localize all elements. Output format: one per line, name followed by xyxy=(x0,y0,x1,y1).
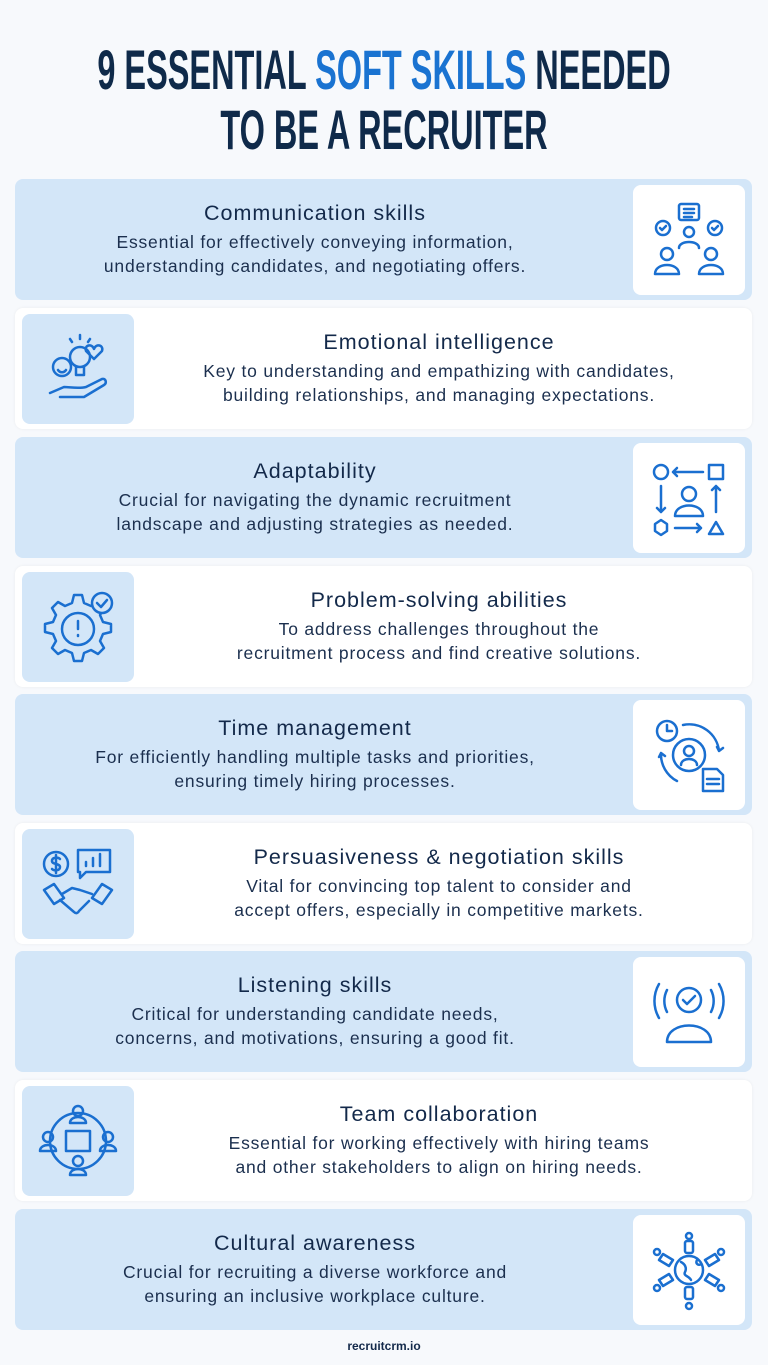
text: emotional: Key to understanding and empathizing with candidates, xyxy=(203,361,675,381)
text: communication: understanding candidates, and negotiating offers. xyxy=(104,256,526,276)
panel: cultural awareness xyxy=(15,1209,752,1330)
panel: team collaboration xyxy=(15,1080,752,1201)
panel: persuasiveness xyxy=(15,823,752,944)
text: team: Team collaboration xyxy=(340,1102,538,1126)
text: time: For efficiently handling multiple tasks and priorities, xyxy=(95,747,535,767)
text: communication: Communication skills xyxy=(204,201,426,225)
icon: negotiation xyxy=(22,829,134,939)
icon: communication xyxy=(633,185,745,295)
icon: team xyxy=(22,1086,134,1196)
text: team: Essential for working effectively with hiring teams xyxy=(229,1133,649,1153)
text: persuasiveness: Persuasiveness & negotiation skills xyxy=(254,845,624,869)
text: listening xyxy=(115,973,515,1048)
text: communication xyxy=(104,201,526,276)
text: emotional xyxy=(203,330,675,405)
text: communication: Essential for effectively conveying information, xyxy=(116,232,514,252)
text: adaptability xyxy=(117,459,513,534)
title xyxy=(97,38,671,161)
icon: listening xyxy=(633,957,745,1067)
text: problem solving: recruitment process and find creative solutions. xyxy=(237,643,641,663)
text: team xyxy=(229,1102,649,1177)
text: problem solving: To address challenges throughout the xyxy=(279,619,599,639)
text: team: and other stakeholders to align on hiring needs. xyxy=(235,1157,643,1177)
text: persuasiveness xyxy=(234,845,644,920)
text: listening: Critical for understanding candidate needs, xyxy=(131,1004,499,1024)
panel: problem-solving xyxy=(15,566,752,687)
text: listening: Listening skills xyxy=(238,973,392,997)
text: emotional: Emotional intelligence xyxy=(323,330,555,354)
icon: cultural xyxy=(633,1215,745,1325)
panel: time management xyxy=(15,694,752,815)
text: cultural: ensuring an inclusive workplace culture. xyxy=(144,1286,486,1306)
footer: recruitcrm.io xyxy=(347,1339,421,1353)
text: persuasiveness: accept offers, especially in competitive markets. xyxy=(234,900,644,920)
text: cultural: Cultural awareness xyxy=(214,1231,416,1255)
text: time: ensuring timely hiring processes. xyxy=(174,771,456,791)
text: listening: concerns, and motivations, ensuring a good fit. xyxy=(115,1028,515,1048)
text: cultural: Crucial for recruiting a diverse workforce and xyxy=(123,1262,507,1282)
text: cultural xyxy=(123,1231,507,1306)
text: adaptability: Crucial for navigating the dynamic recruitment xyxy=(119,490,511,510)
panel: adaptability xyxy=(15,437,752,558)
icon: adaptability xyxy=(633,443,745,553)
text: emotional: building relationships, and managing expectations. xyxy=(223,385,655,405)
text: adaptability: landscape and adjusting strategies as needed. xyxy=(117,514,513,534)
text: time: Time management xyxy=(218,716,412,740)
icon: time xyxy=(633,700,745,810)
icon: problem solving xyxy=(22,572,134,682)
text: problem solving xyxy=(237,588,641,663)
panel: listening xyxy=(15,951,752,1072)
panel: communication skills xyxy=(15,179,752,300)
title: TO BE A RECRUITER xyxy=(220,98,548,161)
text: problem solving: Problem-solving abilities xyxy=(311,588,567,612)
text: persuasiveness: Vital for convincing top talent to consider and xyxy=(246,876,632,896)
title: 9 ESSENTIAL SOFT SKILLS NEEDED xyxy=(97,38,671,101)
text: adaptability: Adaptability xyxy=(253,459,377,483)
text: time xyxy=(95,716,535,791)
icon: emotional xyxy=(22,314,134,424)
panel: emotional intelligence xyxy=(15,308,752,429)
